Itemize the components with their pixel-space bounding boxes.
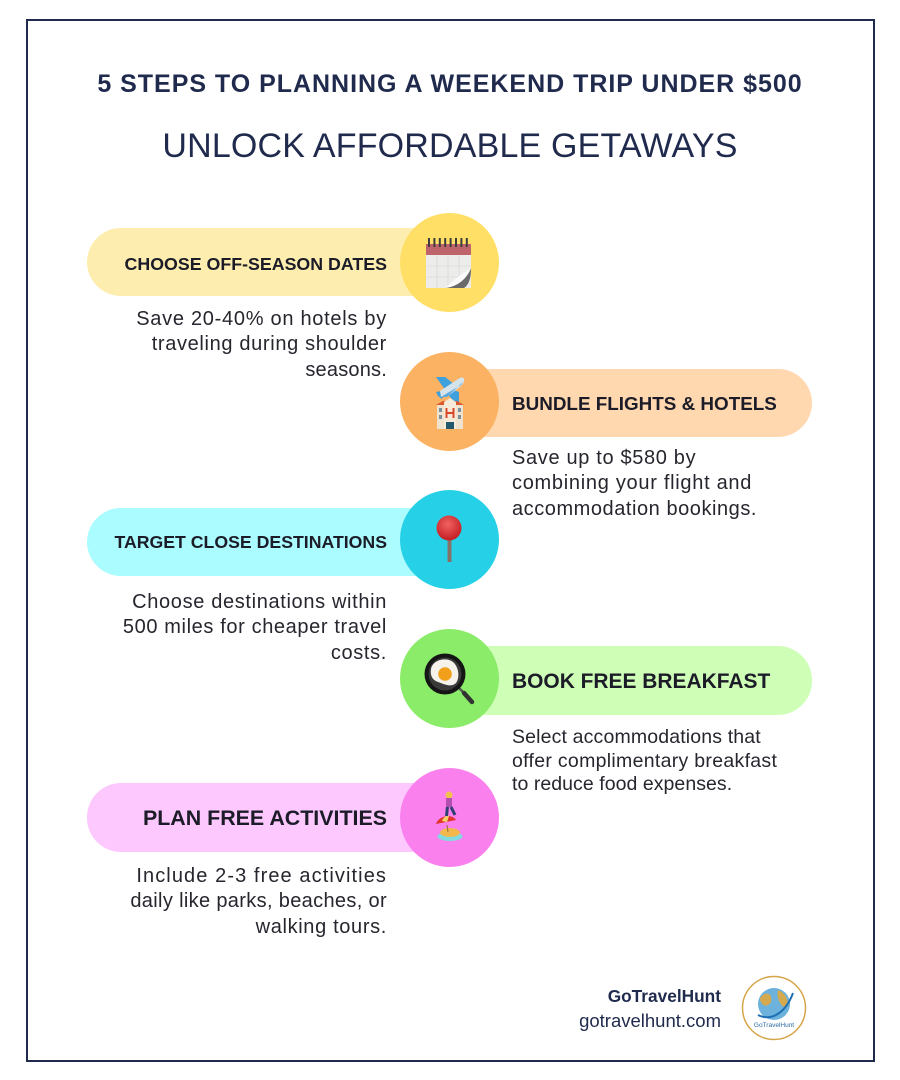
step 2 circle xyxy=(400,352,499,451)
step 5 description: Include 2-3 free activities xyxy=(136,865,387,887)
step 2 description: Save up to $580 by xyxy=(512,447,696,469)
step 4 heading: BOOK FREE BREAKFAST xyxy=(512,670,770,693)
step 1 description: traveling during shoulder xyxy=(152,333,387,355)
step 5 circle xyxy=(400,768,499,867)
step 1 pill xyxy=(87,228,449,296)
step 3 description: Choose destinations within xyxy=(132,591,387,613)
step 3 pill xyxy=(87,508,449,576)
step 2 description: accommodation bookings. xyxy=(512,498,757,520)
step 4 description xyxy=(512,726,777,795)
icon: frying pan with egg xyxy=(424,654,474,704)
step 5 description xyxy=(130,865,387,938)
step 3: target close destinations xyxy=(87,490,499,664)
step 3 description: 500 miles for cheaper travel xyxy=(123,616,387,638)
step 2: bundle flights and hotels xyxy=(400,352,812,520)
step 2 description xyxy=(512,447,757,520)
step 1 description: seasons. xyxy=(305,359,387,381)
step 1 circle xyxy=(400,213,499,312)
step 2 heading: BUNDLE FLIGHTS & HOTELS xyxy=(512,393,777,414)
step 3 heading: TARGET CLOSE DESTINATIONS xyxy=(114,532,387,552)
icon: calendar xyxy=(426,238,471,288)
footer brand name: GoTravelHunt xyxy=(608,986,721,1006)
step 4 description: Select accommodations that xyxy=(512,726,761,748)
step 5: plan free activities xyxy=(87,768,499,938)
icon: person on beach island xyxy=(436,792,462,841)
step 1 description xyxy=(136,308,387,381)
step 4 circle xyxy=(400,629,499,728)
step 3 description xyxy=(123,591,387,664)
step 5 description: daily like parks, beaches, or xyxy=(130,890,387,912)
step 4 description: to reduce food expenses. xyxy=(512,773,732,795)
step 1 heading: CHOOSE OFF-SEASON DATES xyxy=(125,254,387,274)
icon: map pin xyxy=(436,516,462,562)
step 1: choose off-season dates xyxy=(87,213,499,381)
icon: airplane and hotel xyxy=(436,377,464,429)
step 1 description: Save 20-40% on hotels by xyxy=(136,308,387,330)
step 3 circle xyxy=(400,490,499,589)
step 5 pill xyxy=(87,783,449,852)
step 4: book free breakfast xyxy=(400,629,812,795)
logo: GoTravelHunt xyxy=(754,1022,794,1029)
title: 5 STEPS TO PLANNING A WEEKEND TRIP UNDER $500 xyxy=(97,70,803,98)
step 2 pill xyxy=(449,369,812,437)
step 4 description: offer complimentary breakfast xyxy=(512,750,777,772)
step 5 description: walking tours. xyxy=(256,916,387,938)
subtitle: UNLOCK AFFORDABLE GETAWAYS xyxy=(162,127,738,165)
step 3 description: costs. xyxy=(331,642,387,664)
footer url: gotravelhunt.com xyxy=(579,1010,721,1031)
step 2 description: combining your flight and xyxy=(512,472,752,494)
step 5 heading: PLAN FREE ACTIVITIES xyxy=(143,806,387,830)
step 4 pill xyxy=(449,646,812,715)
logo xyxy=(742,976,806,1040)
